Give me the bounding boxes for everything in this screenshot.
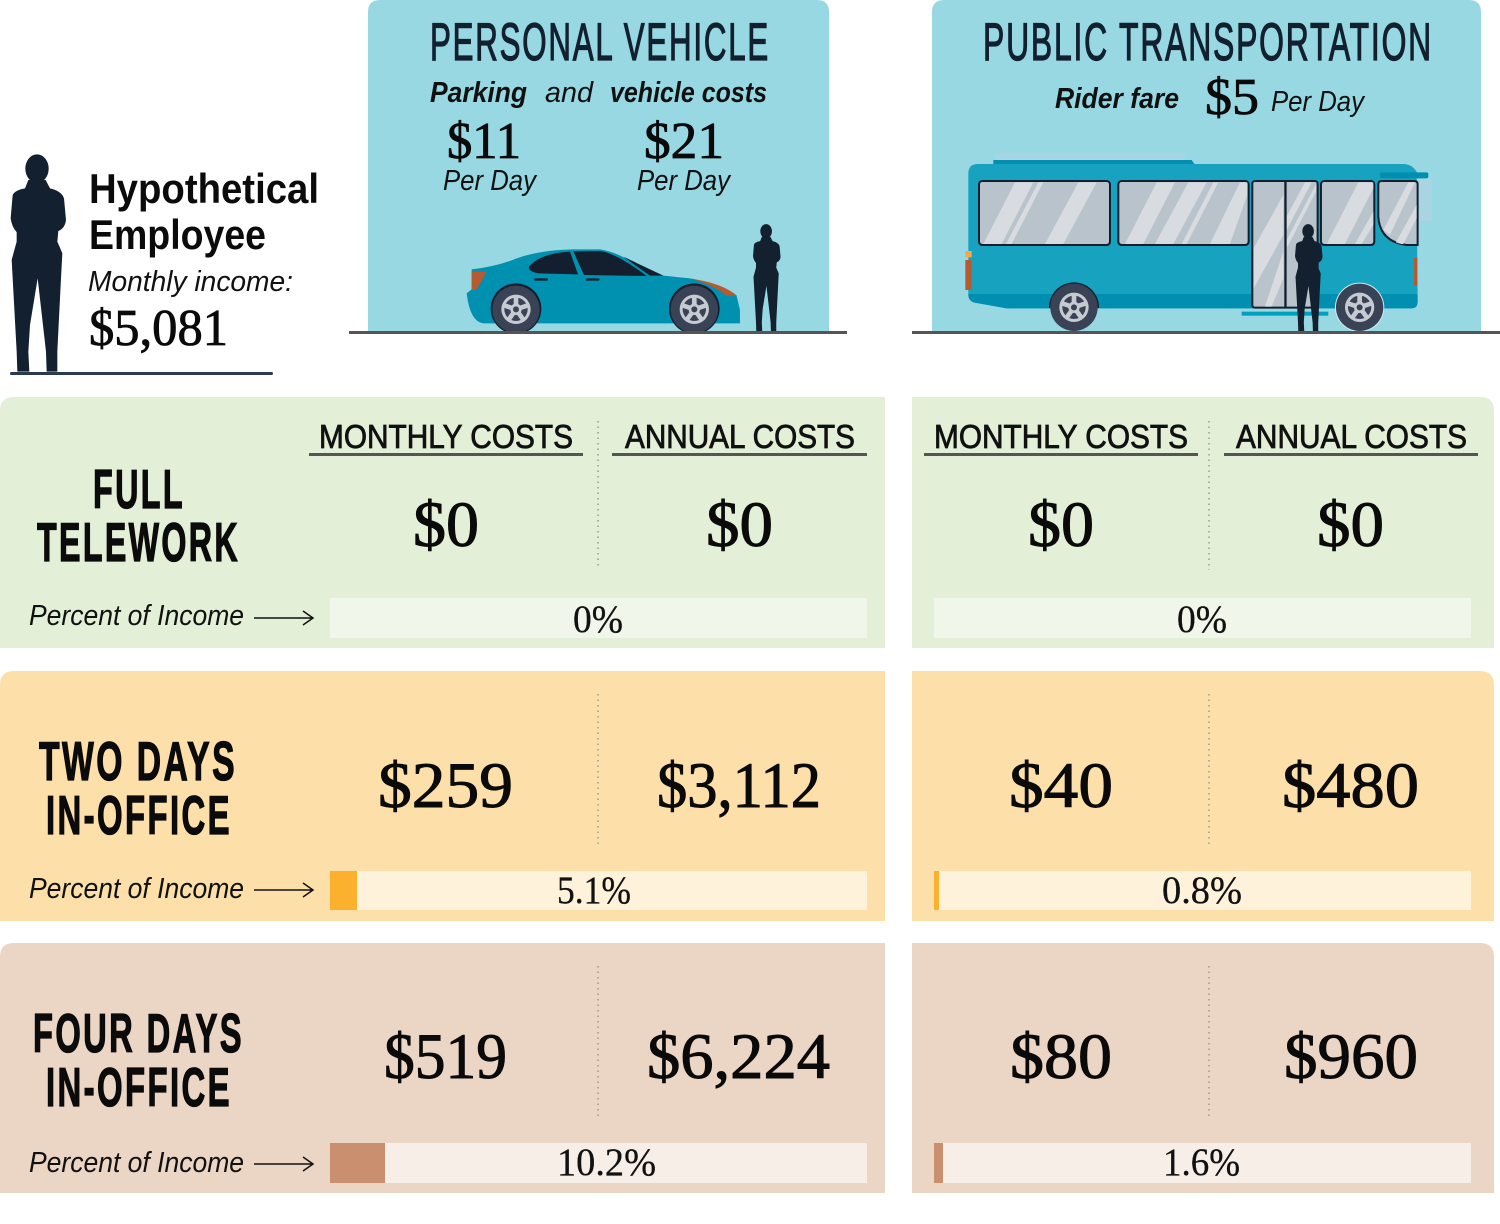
percent bar: 1.6%: [1163, 1141, 1240, 1184]
cost labels: Parking: [430, 77, 527, 109]
heading: four days in-office: [33, 1002, 244, 1118]
rider fare: [1055, 69, 1365, 126]
percent bar: 10.2%: [557, 1141, 656, 1184]
heading: full telework: FULL: [93, 458, 185, 520]
heading: personal vehicle: PERSONAL VEHICLE: [430, 13, 770, 72]
percent of income label: Percent of Income: [29, 873, 244, 905]
annual value: $3,112: [657, 750, 821, 822]
icon: employee silhouette: [11, 154, 66, 372]
parking cost: [443, 113, 537, 197]
percent bar: 0%: [1177, 598, 1227, 641]
row background: [912, 943, 1494, 1193]
monthly value: $0: [1028, 489, 1094, 561]
monthly value: $519: [384, 1021, 507, 1093]
heading: hypothetical employee: Employee: [89, 211, 266, 258]
percent bar: 0.8%: [1162, 869, 1242, 912]
monthly value: $40: [1009, 750, 1113, 822]
row: four days in-office, public transportation: [912, 943, 1494, 1193]
percent of income label: Percent of Income: [29, 1147, 244, 1179]
heading: full telework: TELEWORK: [37, 511, 240, 573]
percent bar: 0%: [573, 598, 623, 641]
percent bar: [934, 598, 1471, 641]
cost labels: and: [545, 77, 594, 109]
annual value: $0: [1317, 489, 1384, 561]
icon: car: [467, 249, 740, 334]
heading: two days in-office: [39, 730, 237, 846]
row: full telework, personal vehicle: [0, 397, 885, 648]
annual value: $480: [1282, 750, 1419, 822]
vehicle cost: Per Day: [637, 165, 731, 197]
row background: [0, 671, 885, 921]
bus ground line: [912, 331, 1500, 334]
monthly value: $259: [378, 750, 513, 822]
car ground line: [349, 331, 847, 334]
percent bar: [330, 1141, 867, 1184]
heading: hypothetical employee: Hypothetical: [89, 165, 319, 212]
parking cost: $11: [447, 113, 521, 170]
panel: personal vehicle: [349, 0, 847, 334]
percent of income label: Percent of Income: [29, 600, 244, 632]
column header: monthly costs: MONTHLY COSTS: [934, 418, 1188, 455]
value: monthly income: $5,081: [89, 300, 228, 357]
employee ground line: [10, 372, 273, 375]
parking cost: Per Day: [443, 165, 537, 197]
heading: four days in-office: IN-OFFICE: [46, 1056, 232, 1118]
vehicle cost: $21: [644, 113, 724, 170]
icon: person beside car: [753, 224, 781, 332]
panel background: [932, 0, 1481, 332]
cost labels: vehicle costs: [610, 77, 767, 109]
icon: bus: [965, 153, 1432, 332]
rider fare: Per Day: [1271, 86, 1365, 118]
heading: two days in-office: TWO DAYS: [39, 730, 237, 792]
heading: hypothetical employee: [89, 165, 319, 258]
annual value: $960: [1284, 1021, 1418, 1093]
monthly value: $0: [413, 489, 479, 561]
label: monthly income: Monthly income:: [88, 266, 293, 298]
row: two days in-office, public transportation: [912, 671, 1494, 921]
row: four days in-office, personal vehicle: [0, 943, 885, 1193]
icon: person at bus door: [1295, 224, 1323, 332]
row background: [912, 671, 1494, 921]
percent bar: [934, 1141, 1471, 1184]
panel: public transportation: [912, 0, 1500, 334]
column header: monthly costs: MONTHLY COSTS: [319, 418, 573, 455]
annual value: $6,224: [647, 1021, 830, 1093]
monthly value: $80: [1010, 1021, 1112, 1093]
heading: four days in-office: FOUR DAYS: [33, 1002, 244, 1064]
row background: [0, 397, 885, 648]
row background: [0, 943, 885, 1193]
rider fare: $5: [1205, 69, 1259, 126]
cost labels: [430, 77, 767, 109]
column header: annual costs: ANNUAL COSTS: [625, 418, 855, 455]
percent bar: [330, 869, 867, 912]
percent bar: 5.1%: [557, 869, 631, 912]
percent bar: [934, 869, 1471, 912]
row: full telework, public transportation: [912, 397, 1494, 648]
annual value: $0: [706, 489, 773, 561]
panel: hypothetical employee: [10, 154, 319, 375]
column header: annual costs: ANNUAL COSTS: [1236, 418, 1467, 455]
row: two days in-office, personal vehicle: [0, 671, 885, 921]
heading: two days in-office: IN-OFFICE: [46, 784, 232, 846]
panel background: [368, 0, 829, 332]
rider fare: Rider fare: [1055, 83, 1179, 115]
vehicle cost: [637, 113, 731, 197]
percent bar: [330, 598, 867, 641]
row background: [912, 397, 1494, 648]
heading: full telework: [37, 458, 240, 573]
